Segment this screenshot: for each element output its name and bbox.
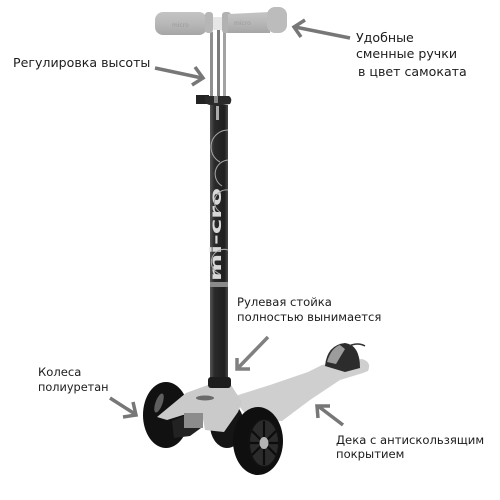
- arrow: wheels: [110, 398, 136, 417]
- arrow: deck: [317, 406, 343, 425]
- label: grips: [356, 30, 467, 79]
- label: grips: Удобные: [356, 30, 414, 45]
- label: wheels: [38, 365, 109, 394]
- label: steering column: полностью вынимается: [237, 310, 381, 324]
- label: deck: покрытием: [336, 447, 404, 461]
- handlebar stems: [209, 17, 228, 96]
- rear wheel behind front body: [210, 402, 244, 448]
- handlebar grips: micro: [172, 22, 189, 29]
- label: wheels: полиуретан: [38, 381, 109, 394]
- arrow: steering column: [237, 337, 268, 369]
- front body: [157, 377, 242, 438]
- left front wheel: [143, 382, 189, 448]
- handlebar grips: micro: [234, 20, 251, 27]
- height clamp: [196, 95, 231, 105]
- steering pole: mi-cro: [207, 188, 225, 281]
- label: wheels: Колеса: [38, 365, 81, 379]
- arrow: grips: [294, 20, 350, 38]
- right front wheel: [233, 407, 283, 475]
- steering pole: [207, 105, 228, 380]
- label: height adjustment: Регулировка высоты: [13, 55, 150, 70]
- arrow: height adjustment: [155, 67, 203, 85]
- label: grips: в цвет самоката: [358, 64, 467, 79]
- handlebar grips: [155, 7, 287, 35]
- scooter: [143, 7, 369, 475]
- rear wheel and brake: [325, 343, 365, 372]
- label: steering column: [237, 295, 381, 324]
- label: deck: [336, 433, 484, 461]
- label: deck: Дека с антискользящим: [336, 433, 484, 447]
- label: steering column: Рулевая стойка: [237, 295, 332, 309]
- deck: [232, 359, 369, 421]
- label: grips: сменные ручки: [356, 46, 457, 61]
